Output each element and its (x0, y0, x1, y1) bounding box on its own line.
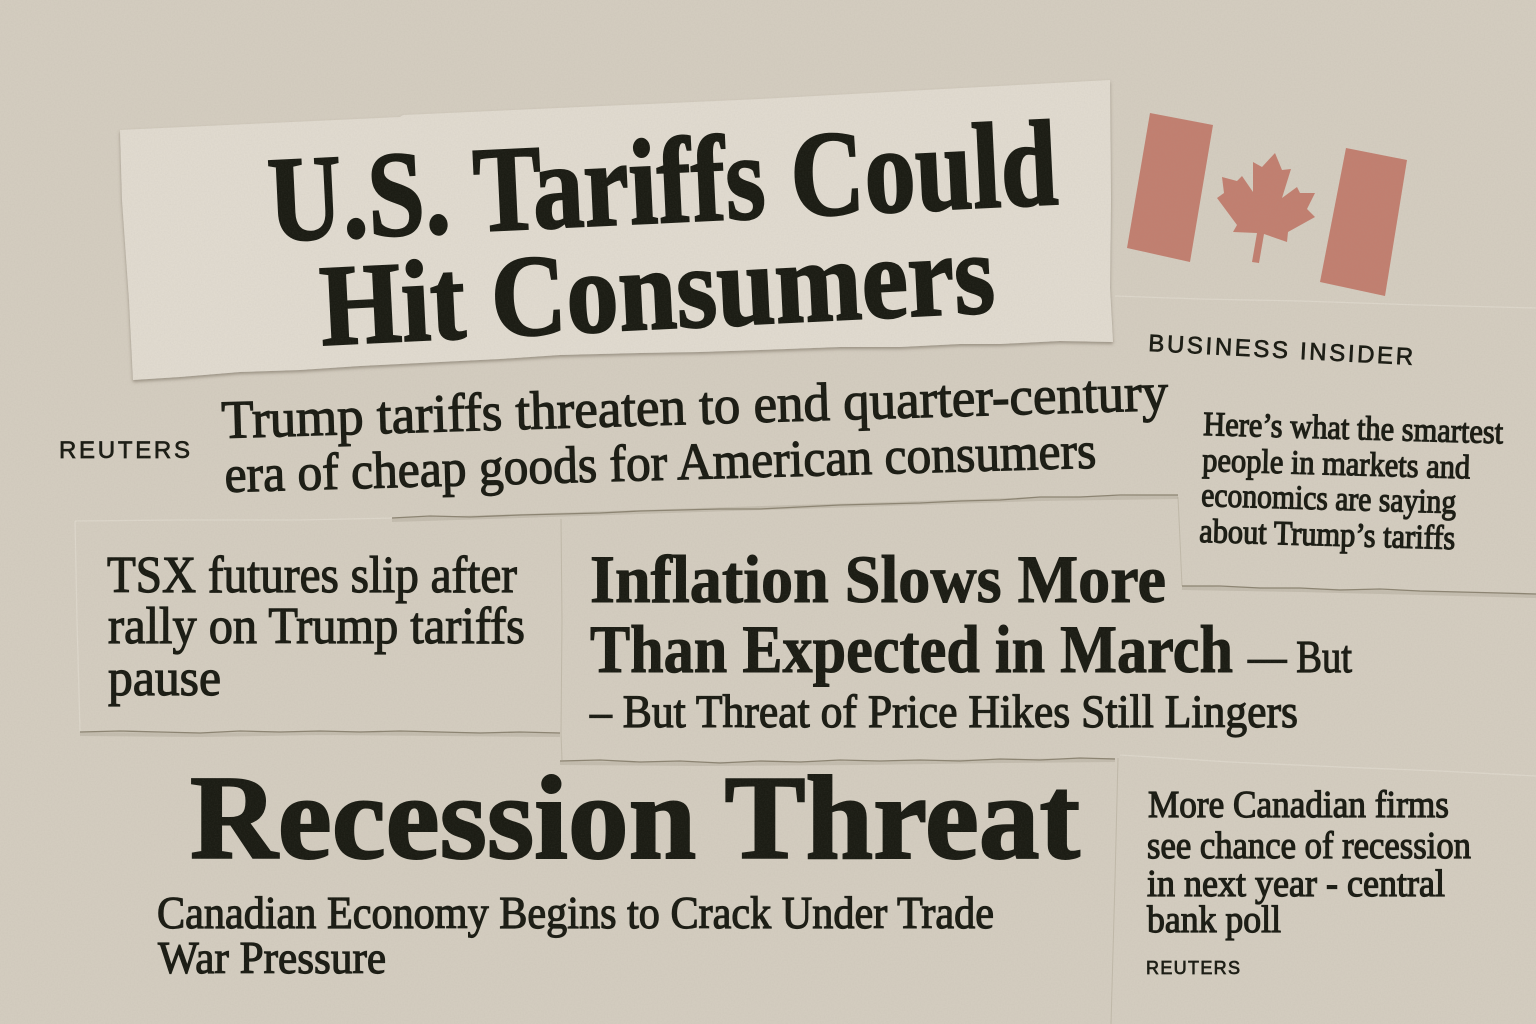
text block: smartest people in markets: about Trump’s tariffs (1199, 513, 1456, 557)
headline: inflation slows: Than Expected in March (590, 611, 1233, 687)
headline: TSX futures: rally on Trump tariffs (108, 598, 525, 655)
headline: inflation slows: — But (1247, 631, 1352, 682)
headline: TSX futures (107, 547, 525, 707)
headline: TSX futures: pause (108, 650, 221, 707)
headline: inflation slows: – But Threat of Price Hikes Still Lingers (589, 686, 1298, 738)
headline: Recession Threat: Recession Threat (190, 751, 1080, 884)
text block: Canadian firms poll: More Canadian firms (1148, 784, 1449, 826)
subheading: Canadian economy: Canadian Economy Begins to Crack Under Trade (157, 887, 994, 938)
source label: Reuters small: REUTERS (1146, 958, 1240, 978)
main headline: Hit Consumers (317, 210, 997, 371)
text block: Canadian firms poll: see chance of recession (1147, 825, 1471, 867)
text block: smartest people in markets: economics are saying (1201, 477, 1457, 521)
text block: Canadian firms poll: bank poll (1147, 899, 1281, 941)
paper: main headline clipping (120, 80, 1113, 380)
text block: smartest people in markets: Here’s what the smartest (1203, 406, 1504, 451)
main headline (265, 96, 1060, 371)
headline: Trump tariffs cheap goods (221, 362, 1169, 504)
source label: Reuters: REUTERS (59, 437, 190, 464)
headline: TSX futures: TSX futures slip after (107, 547, 517, 604)
main headline: U.S. Tariffs Could (265, 96, 1060, 268)
text block: Canadian firms poll (1147, 784, 1471, 941)
text block: smartest people in markets (1199, 406, 1504, 557)
headline: Trump tariffs cheap goods: era of cheap goods for American consumers (224, 423, 1097, 504)
icon: Canadian flag (1127, 113, 1407, 296)
subheading: Canadian economy: War Pressure (158, 932, 386, 983)
text block: Canadian firms poll: in next year - central (1147, 863, 1445, 905)
text block: smartest people in markets: people in markets and (1202, 442, 1471, 486)
headline: inflation slows (589, 541, 1352, 738)
subheading: Canadian economy (157, 887, 994, 983)
paper edges of the background clippings (75, 296, 1536, 1024)
headline: Trump tariffs cheap goods: Trump tariffs threaten to end quarter-century (221, 362, 1169, 450)
headline: inflation slows: Inflation Slows More (590, 541, 1166, 617)
source label: Business Insider: BUSINESS INSIDER (1148, 330, 1414, 371)
